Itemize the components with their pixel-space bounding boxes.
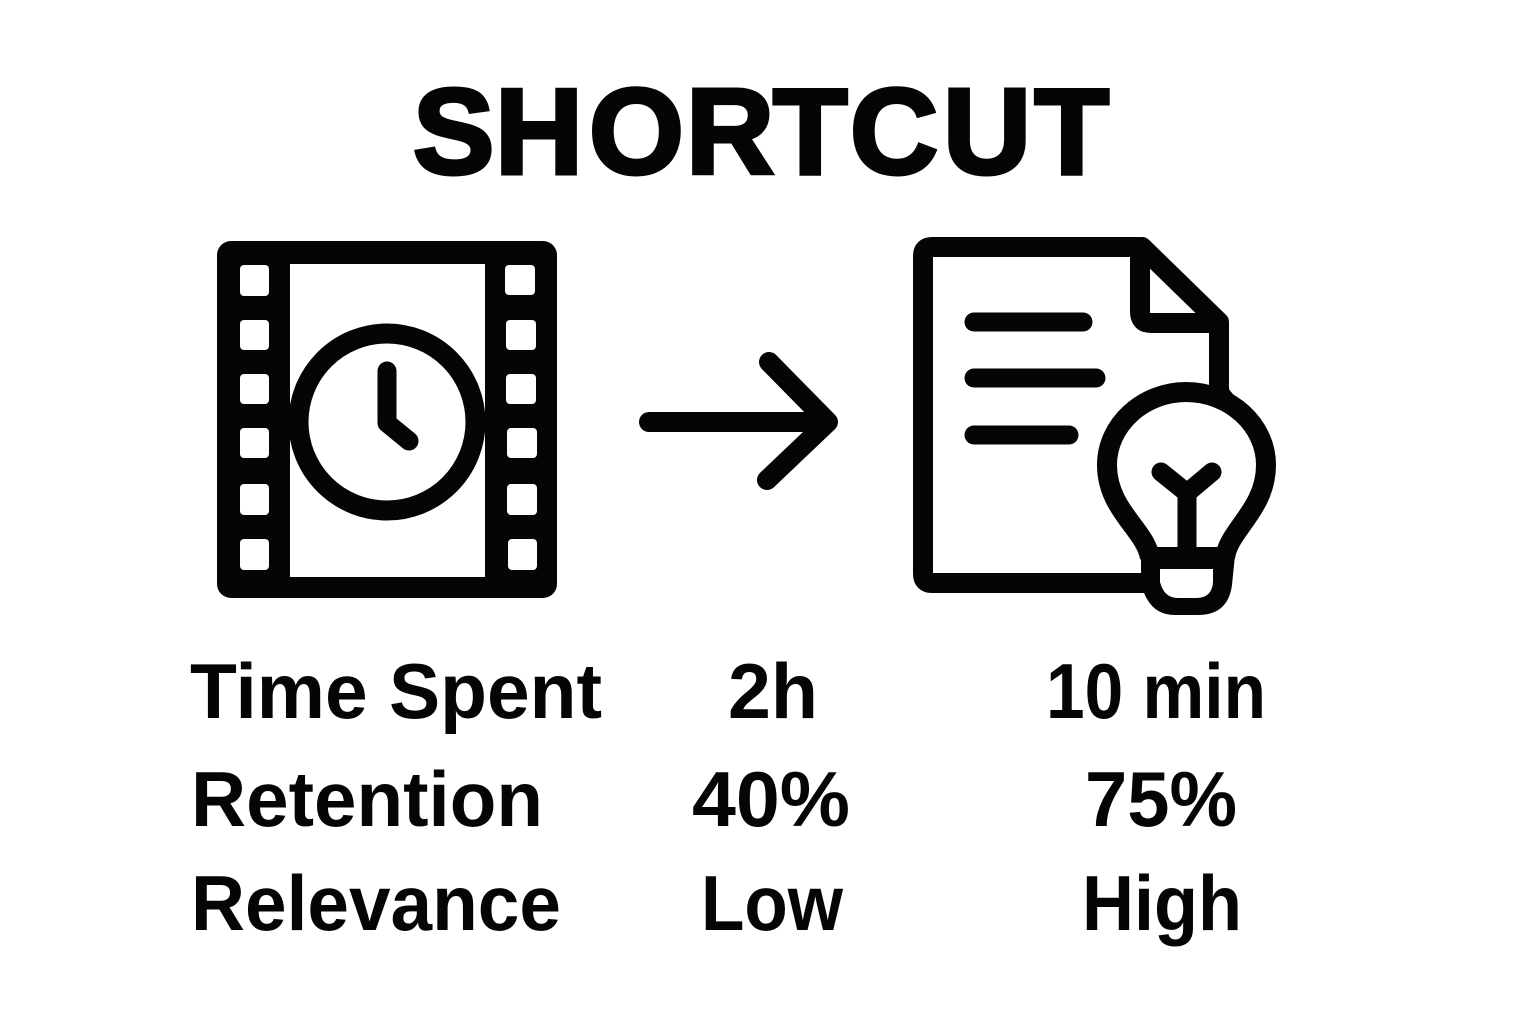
light bulb xyxy=(1107,392,1266,558)
document fold xyxy=(1140,250,1216,323)
row: time spent xyxy=(190,647,1266,735)
row: relevance: High xyxy=(1082,859,1242,947)
row: retention: 75% xyxy=(1085,755,1237,843)
row: time spent: Time Spent xyxy=(190,647,602,735)
bulb filament xyxy=(1161,472,1212,550)
icon: film strip with clock xyxy=(217,241,557,598)
row: relevance: Low xyxy=(701,859,843,947)
row: retention: 40% xyxy=(692,755,850,843)
row: time spent: 10 min xyxy=(1046,647,1266,735)
comparison table xyxy=(190,647,1266,947)
icon: document with light bulb xyxy=(923,247,1266,615)
row: retention xyxy=(191,755,1237,843)
row: retention: Retention xyxy=(191,755,543,843)
row: relevance xyxy=(191,859,1242,947)
document outline xyxy=(923,247,1219,583)
arrow xyxy=(649,362,828,480)
title: SHORTCUT xyxy=(413,64,1109,200)
bulb junction flare xyxy=(1222,386,1242,402)
row: relevance: Relevance xyxy=(191,859,561,947)
bulb base xyxy=(1141,547,1235,615)
text lines xyxy=(974,322,1096,435)
row: time spent: 2h xyxy=(728,647,818,735)
